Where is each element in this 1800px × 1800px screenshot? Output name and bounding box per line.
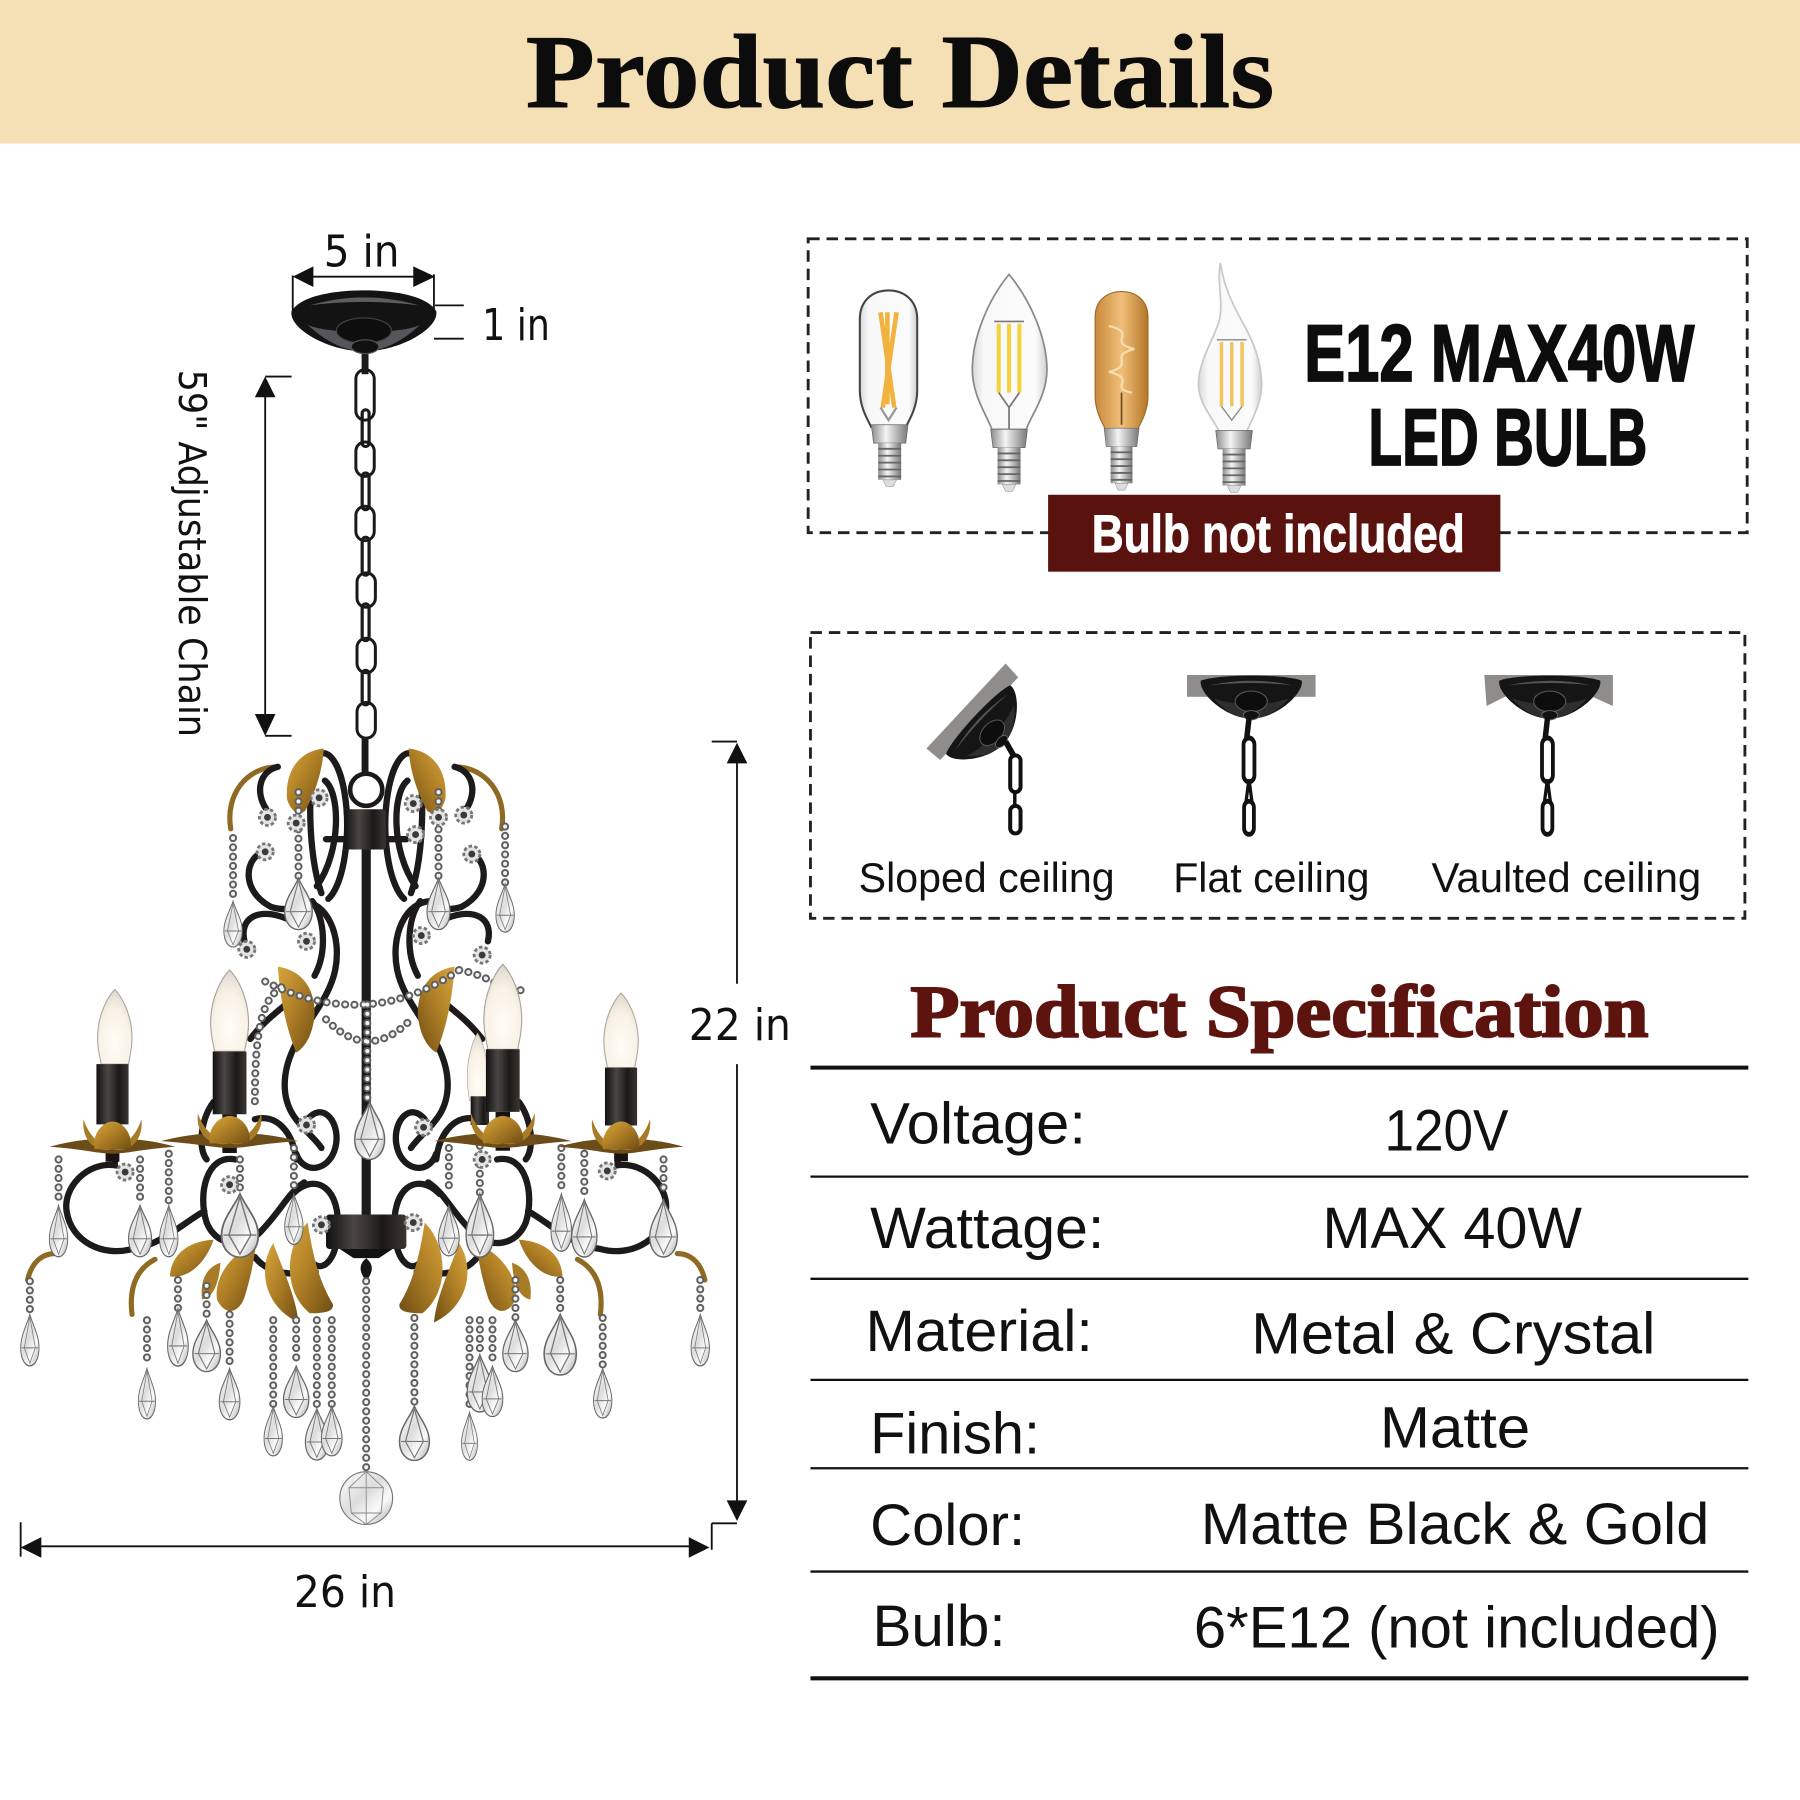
chandelier bbox=[21, 748, 709, 1524]
dimension: 1 in: 1 in bbox=[482, 301, 550, 351]
right frame (mirrored) bbox=[385, 748, 705, 1322]
crystal rosettes bbox=[117, 790, 615, 1233]
row: finish bbox=[870, 1396, 1530, 1466]
label: sloped ceiling: Sloped ceiling bbox=[859, 855, 1115, 901]
dimension: 59 inch adjustable chain bbox=[170, 370, 292, 737]
dimension: 26 in: 26 in bbox=[294, 1568, 396, 1618]
icon: vaulted ceiling mount bbox=[1484, 675, 1613, 834]
dimension: 22 in bbox=[689, 742, 791, 1550]
dimension: 26 in bbox=[21, 1522, 709, 1618]
row: material bbox=[866, 1299, 1655, 1366]
heading: E12 MAX40W: E12 MAX40W bbox=[1304, 309, 1695, 399]
dimension: 59 inch adjustable chain: 59" Adjustable Chain bbox=[170, 370, 214, 737]
header band bbox=[0, 0, 1800, 143]
row: voltage bbox=[870, 1091, 1508, 1163]
dashed frame bbox=[808, 239, 1747, 533]
row: voltage: Voltage: bbox=[870, 1091, 1086, 1156]
row: wattage: Wattage: bbox=[870, 1196, 1104, 1261]
icon: flame tip bulb bbox=[1198, 263, 1262, 492]
centre column and hubs bbox=[326, 774, 406, 1281]
gold leaves bbox=[287, 748, 324, 813]
icon: tubular filament bulb bbox=[860, 290, 917, 487]
table rules bbox=[810, 1068, 1748, 1678]
icon: amber spiral bulb bbox=[1095, 292, 1148, 490]
row: wattage bbox=[870, 1196, 1583, 1261]
label: flat ceiling: Flat ceiling bbox=[1173, 855, 1370, 901]
dashed frame bbox=[810, 633, 1745, 918]
row: bulb bbox=[872, 1594, 1720, 1660]
row: material: Material: bbox=[866, 1299, 1093, 1364]
icon: candle filament bulb bbox=[972, 274, 1047, 491]
panel: chandelier with dimensions bbox=[21, 227, 791, 1618]
icon: flat ceiling mount bbox=[1187, 675, 1316, 834]
row: wattage: MAX 40W bbox=[1322, 1196, 1583, 1261]
row: bulb: 6*E12 (not included) bbox=[1194, 1595, 1720, 1660]
row: finish: Finish: bbox=[870, 1401, 1040, 1466]
chain bbox=[356, 349, 375, 775]
label: vaulted ceiling: Vaulted ceiling bbox=[1432, 855, 1701, 901]
crystal ball bbox=[340, 1472, 393, 1524]
crystal drops bbox=[21, 878, 709, 1460]
row: color: Matte Black & Gold bbox=[1201, 1492, 1709, 1557]
row: finish: Matte bbox=[1380, 1396, 1530, 1461]
callout: bulb not included: Bulb not included bbox=[1092, 505, 1465, 564]
canopy bbox=[291, 290, 436, 354]
row: color: Color: bbox=[870, 1493, 1025, 1558]
panel: bulb type box bbox=[808, 239, 1747, 572]
dimension: 22 in: 22 in bbox=[689, 1001, 791, 1051]
panel: ceiling types bbox=[810, 633, 1745, 918]
title: Product Details bbox=[526, 14, 1274, 130]
left frame bbox=[28, 748, 347, 1322]
row: bulb: Bulb: bbox=[872, 1594, 1006, 1659]
heading: Product Specification bbox=[910, 972, 1648, 1054]
row: color bbox=[870, 1492, 1709, 1558]
dimension: 5 in bbox=[293, 227, 435, 313]
heading: LED BULB: LED BULB bbox=[1368, 393, 1647, 483]
row: voltage: 120V bbox=[1384, 1098, 1508, 1163]
bead strands and garlands bbox=[30, 792, 700, 1472]
row: material: Metal & Crystal bbox=[1251, 1301, 1655, 1366]
candle bulbs and cups bbox=[50, 964, 684, 1162]
icon: sloped ceiling mount bbox=[926, 664, 1037, 833]
dimension: 5 in: 5 in bbox=[324, 227, 399, 277]
dimension: 1 in bbox=[434, 301, 550, 351]
panel: product specification bbox=[810, 972, 1748, 1678]
callout: bulb not included bbox=[1048, 495, 1500, 572]
